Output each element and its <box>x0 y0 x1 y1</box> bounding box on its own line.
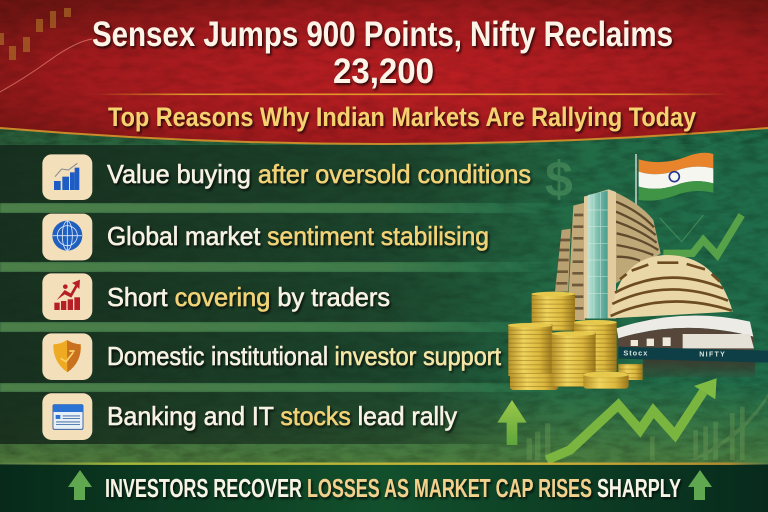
bottom banner text: INVESTORS RECOVER LOSSES AS MARKET CAP RISES SHARPLY <box>105 473 681 503</box>
illustration: stock exchange, flag, coins and arrows <box>497 152 768 460</box>
panel: bottom banner <box>0 462 768 512</box>
faint dollar sign: $ <box>545 152 573 208</box>
exchange sign: Stocx <box>623 348 648 357</box>
gold coin stacks <box>508 292 643 390</box>
dome <box>611 255 755 377</box>
faint chart arrow <box>663 215 742 255</box>
reason 3: Short covering by traders <box>107 282 390 312</box>
panel: reason row stripes <box>0 145 590 444</box>
divider line <box>90 94 730 95</box>
title: 23,200 <box>333 51 434 91</box>
candlestick decoration <box>0 8 71 60</box>
icon tile: chart <box>42 154 92 200</box>
icon tile: browser window <box>42 393 92 440</box>
flag <box>635 153 713 209</box>
rising green arrow <box>547 392 703 460</box>
subtitle: Top Reasons Why Indian Markets Are Rallying Today <box>108 102 696 132</box>
icon tile: shield <box>42 333 92 380</box>
icon tile: red rising bars <box>42 273 92 320</box>
panel: red header banner <box>0 0 768 144</box>
reasons text list <box>107 159 531 431</box>
left up arrow <box>68 470 92 500</box>
exchange sign: NIFTY <box>699 352 726 359</box>
reason 4: Domestic institutional investor support <box>107 341 502 371</box>
right up arrow <box>688 470 712 500</box>
icon tile: globe <box>42 214 92 260</box>
reason 1: Value buying after oversold conditions <box>107 159 531 189</box>
reason 5: Banking and IT stocks lead rally <box>107 401 457 431</box>
reason 2: Global market sentiment stabilising <box>107 221 489 251</box>
small up arrow <box>497 400 527 445</box>
faint chart bars and curve <box>527 393 768 460</box>
tower <box>555 189 661 320</box>
title <box>92 14 673 91</box>
exchange sign <box>618 347 768 363</box>
arrow head <box>694 378 717 399</box>
